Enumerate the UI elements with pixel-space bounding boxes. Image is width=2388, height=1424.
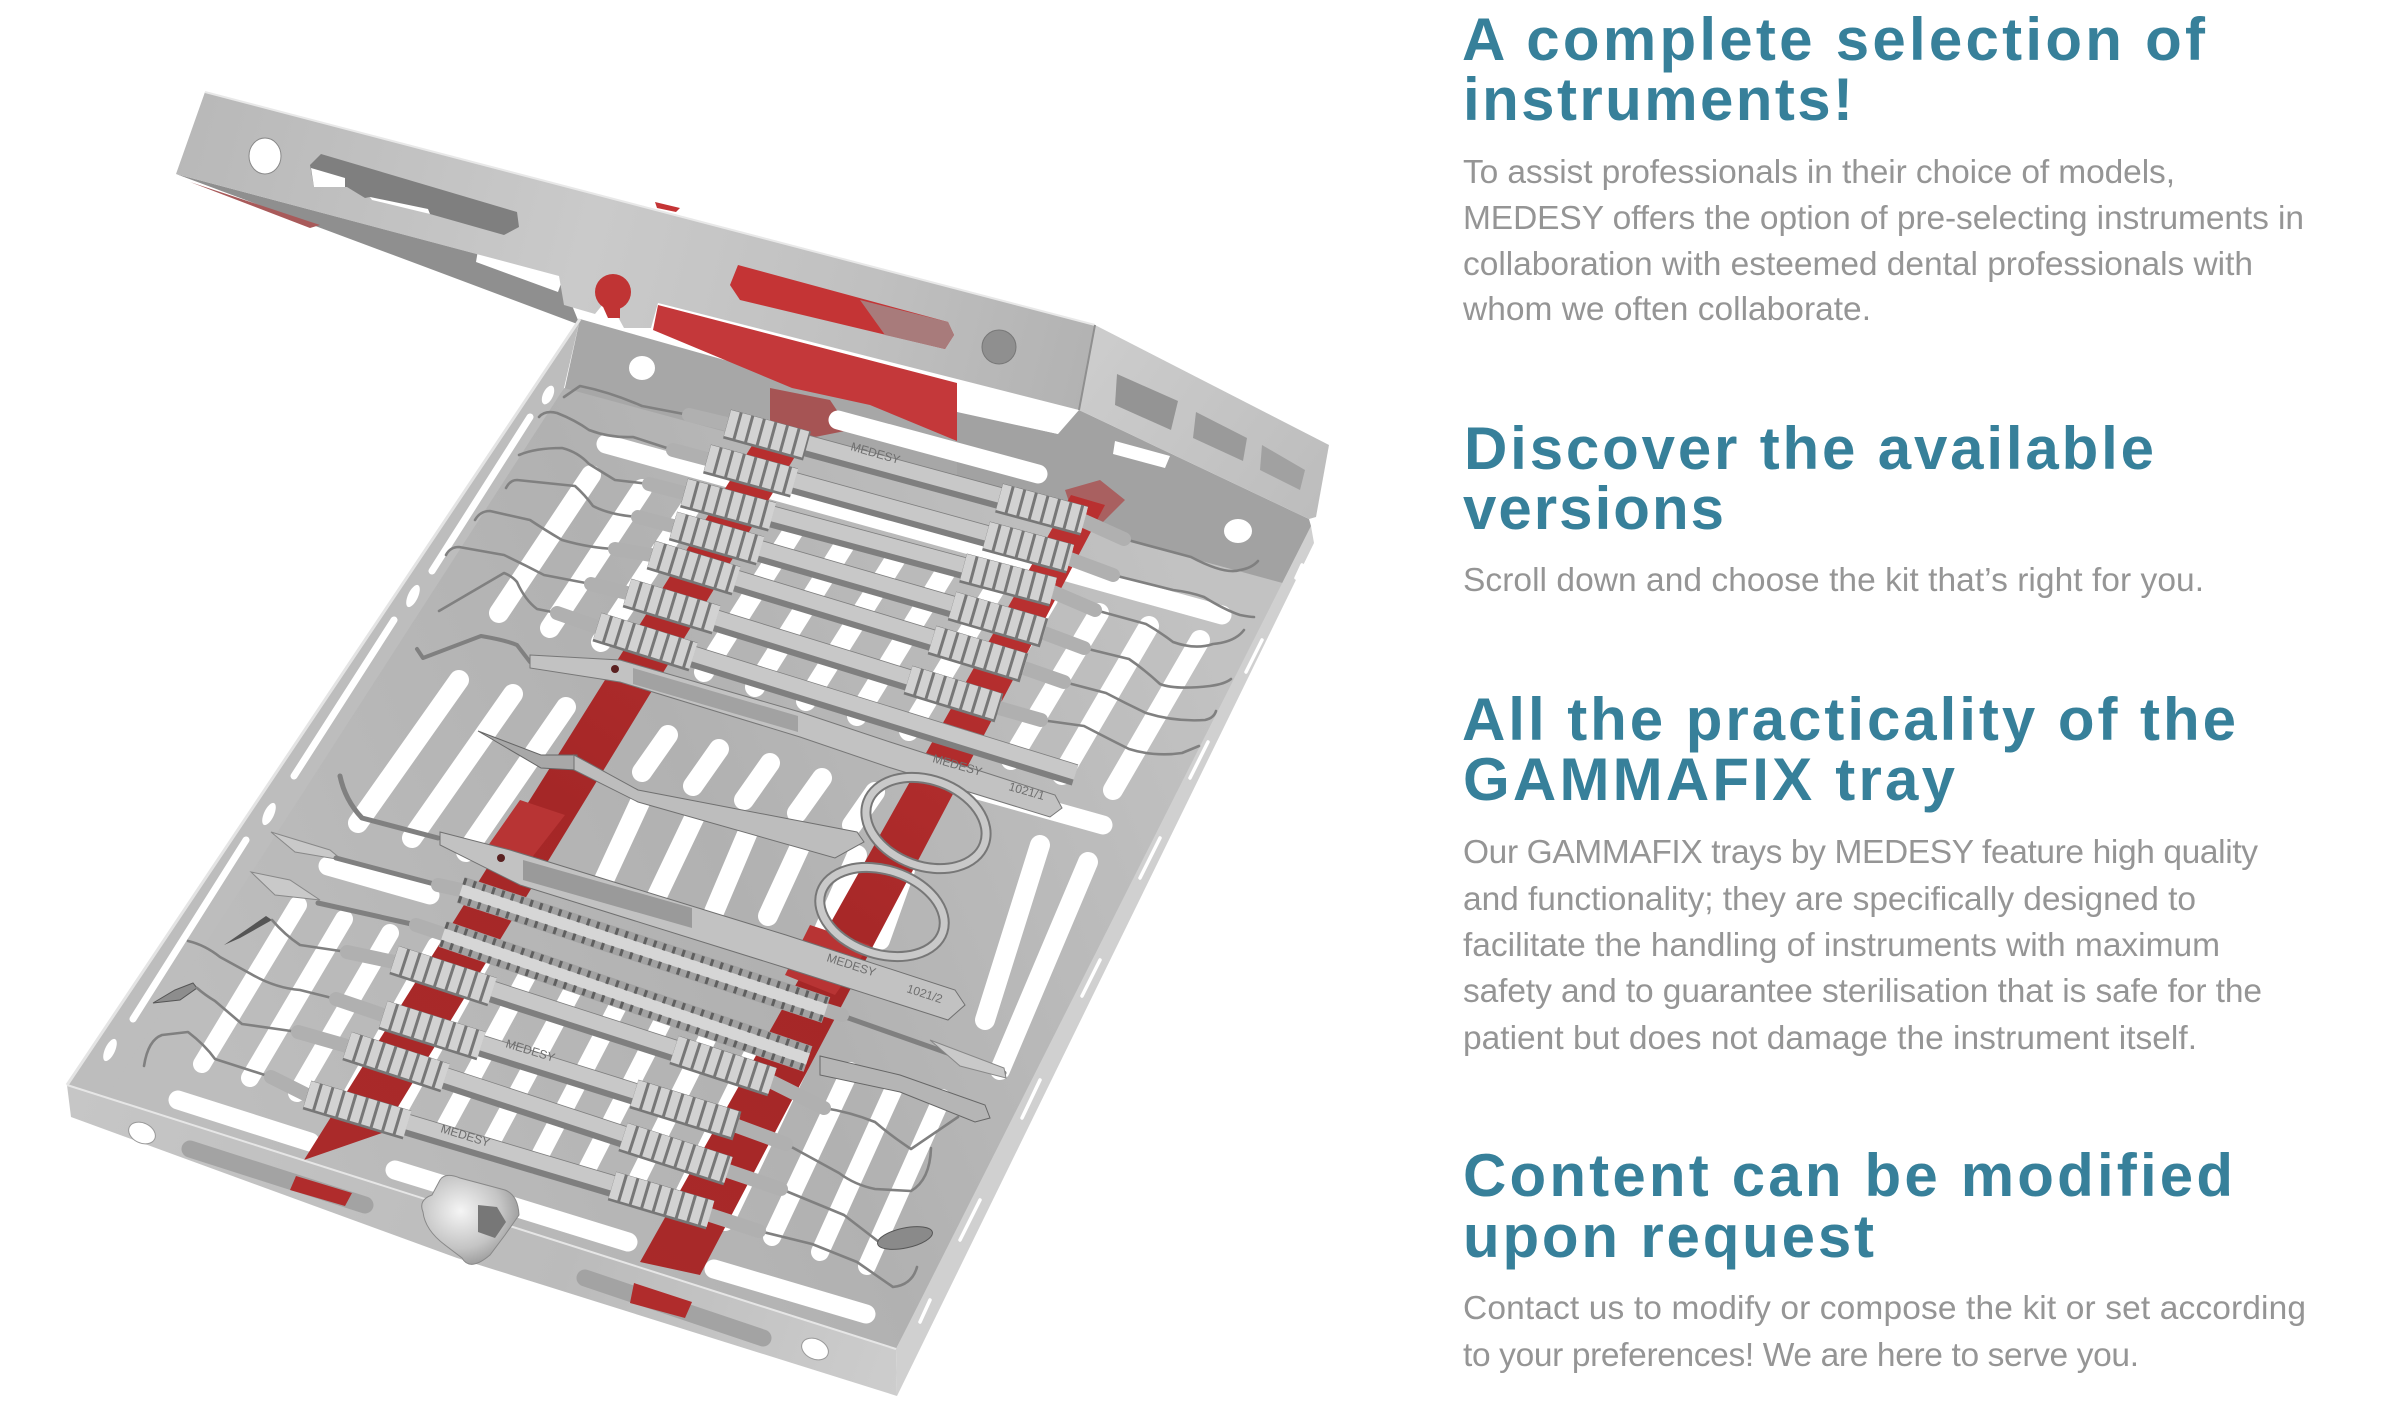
front tray wall bbox=[67, 1085, 897, 1396]
heading bbox=[1463, 1142, 2233, 1270]
lid window right bbox=[730, 265, 954, 349]
heading bbox=[1462, 6, 2206, 133]
heading bbox=[1463, 415, 2154, 542]
label: forceps code: 1021/2 bbox=[905, 982, 945, 1006]
lid notch bbox=[595, 274, 631, 310]
curette L6 bbox=[144, 1032, 917, 1287]
red tip above lid bbox=[655, 202, 680, 212]
excavator L5 bbox=[153, 983, 934, 1254]
tray lid underside bbox=[176, 174, 580, 325]
paragraph: safety and to guarantee sterilisation that is safe for the bbox=[1463, 973, 2262, 1010]
lid hole left bbox=[249, 138, 281, 174]
curette 4 bbox=[506, 480, 1231, 688]
tray floor bbox=[67, 388, 1290, 1349]
curette 1 bbox=[564, 386, 1258, 571]
curette 2 bbox=[539, 412, 1254, 617]
lid top plate bbox=[176, 92, 1095, 410]
text block: GAMMAFIX tray bbox=[1462, 686, 2262, 1057]
paragraph bbox=[1463, 1290, 2306, 1374]
text block: available versions bbox=[1463, 415, 2204, 599]
text block: complete selection bbox=[1462, 6, 2304, 328]
heading: instruments! bbox=[1463, 66, 1853, 133]
paragraph: Our GAMMAFIX trays by MEDESY feature high quality bbox=[1463, 834, 2258, 871]
heading: versions bbox=[1463, 475, 1724, 542]
text block: content modified bbox=[1463, 1142, 2306, 1374]
lid hole right bbox=[982, 330, 1016, 364]
curette L4 bbox=[188, 941, 931, 1191]
latch knob bbox=[422, 1175, 519, 1264]
spatula L2 bbox=[251, 872, 990, 1122]
paragraph: to your preferences! We are here to serve you. bbox=[1463, 1337, 2139, 1374]
paragraph: Contact us to modify or compose the kit or set according bbox=[1463, 1290, 2306, 1327]
floor slots bbox=[178, 420, 1222, 1314]
curette 6 bbox=[446, 547, 1199, 754]
back wall of tray bbox=[564, 319, 1311, 596]
curette 5 bbox=[475, 511, 1216, 720]
lid window left bbox=[310, 154, 519, 235]
forceps 1021/2 bbox=[340, 776, 965, 1020]
heading: upon request bbox=[1463, 1203, 1874, 1270]
paragraph: MEDESY offers the option of pre-selecting instruments in bbox=[1463, 200, 2304, 237]
label: brand: MEDESY bbox=[849, 439, 902, 467]
label: brand: MEDESY bbox=[439, 1121, 492, 1150]
left tray wall bbox=[67, 319, 580, 1095]
paragraph: Scroll down and choose the kit that’s right for you. bbox=[1463, 562, 2204, 599]
heading bbox=[1462, 686, 2236, 813]
paragraph: patient but does not damage the instrument itself. bbox=[1463, 1020, 2197, 1057]
red mat under lid bbox=[653, 305, 1170, 525]
paragraph bbox=[1463, 834, 2262, 1057]
scissors bbox=[478, 731, 999, 972]
paragraph: and functionality; they are specifically designed to bbox=[1463, 881, 2196, 918]
lid side face bbox=[1079, 325, 1329, 519]
paragraph: To assist professionals in their choice of models, bbox=[1463, 154, 2175, 191]
label: forceps maker: MEDESY bbox=[931, 751, 984, 779]
heading: A complete selection of bbox=[1462, 6, 2206, 73]
illustration: open instrument tray bbox=[67, 92, 1329, 1396]
heading: GAMMAFIX tray bbox=[1463, 746, 1956, 813]
label: brand: MEDESY bbox=[504, 1036, 557, 1065]
paragraph: whom we often collaborate. bbox=[1462, 291, 1871, 328]
right tray wall bbox=[896, 526, 1314, 1396]
paragraph bbox=[1462, 154, 2304, 328]
heading: Content can be modified bbox=[1463, 1142, 2233, 1209]
single-ended instrument 7 bbox=[439, 573, 1076, 775]
label: forceps code: 1021/1 bbox=[1007, 779, 1047, 803]
heading: Discover the available bbox=[1464, 415, 2154, 482]
paragraph: collaboration with esteemed dental professionals with bbox=[1463, 246, 2253, 283]
label: forceps maker: MEDESY bbox=[825, 951, 878, 980]
red silicone strips bbox=[304, 420, 1105, 1275]
heading: All the practicality of the bbox=[1462, 686, 2236, 753]
forceps 1021/1 bbox=[417, 636, 1062, 817]
curette 3 bbox=[519, 448, 1244, 647]
spatula L1 bbox=[271, 832, 1006, 1078]
curette L3 bbox=[224, 916, 958, 1149]
paragraph: facilitate the handling of instruments with maximum bbox=[1463, 927, 2220, 964]
